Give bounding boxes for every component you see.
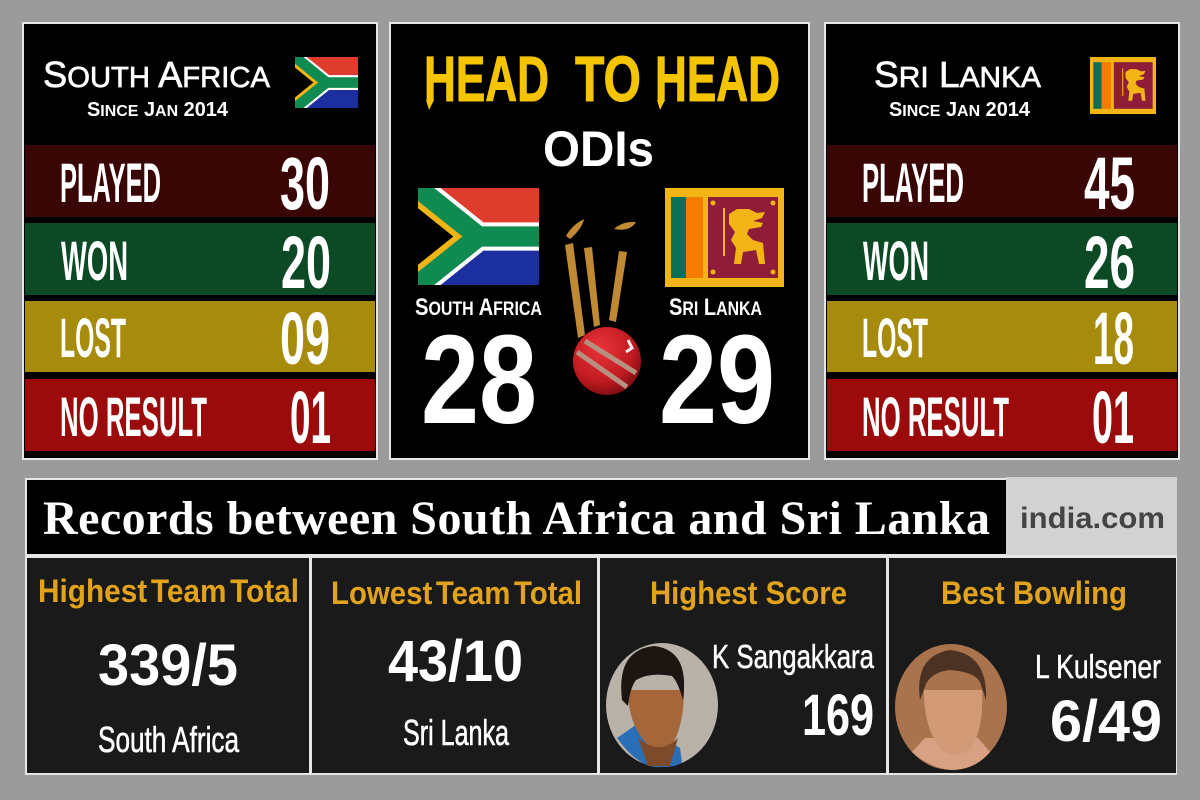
row: played: 45 (1084, 142, 1135, 225)
card: lowest team total: Sri Lanka (403, 712, 510, 753)
row: no result (827, 376, 1177, 459)
row: no result (25, 376, 375, 459)
heading: Sri Lanka: SRI LANKA (874, 54, 1042, 95)
portrait: L Kulsener (895, 644, 1007, 770)
card: lowest team total (312, 558, 597, 773)
title bar: records between teams (27, 480, 1006, 554)
row: played: PLAYED (60, 151, 161, 214)
card: lowest team total: Lowest Team Total (331, 575, 582, 611)
icon: South Africa flag small (295, 57, 358, 108)
card: best bowling: L Kulsener (1035, 648, 1161, 685)
title: head to head (424, 43, 780, 115)
row: no result: NO RESULT (60, 385, 207, 448)
row: lost (827, 297, 1177, 380)
panel: head to head (390, 23, 809, 459)
row: no result: NO RESULT (862, 385, 1009, 448)
subheading: since Jan 2014: SINCE JAN 2014 (87, 99, 229, 121)
score: South Africa 28: 28 (421, 309, 537, 450)
row: played: PLAYED (862, 151, 964, 214)
row: lost: 09 (280, 297, 330, 380)
card: highest score: 169 (802, 683, 874, 748)
panel: Sri Lanka stats (825, 23, 1179, 459)
card: lowest team total: 43/10 (388, 629, 523, 694)
row: played: 30 (280, 142, 330, 225)
panel: South Africa stats (23, 23, 377, 459)
row: lost: 18 (1093, 297, 1134, 380)
card: highest team total: South Africa (98, 719, 240, 760)
title: head to head: TO (575, 43, 641, 115)
icon: Sri Lanka flag small (1090, 57, 1156, 114)
row: won: 26 (1084, 221, 1135, 304)
score: Sri Lanka 29: 29 (659, 309, 775, 450)
card: highest team total (27, 558, 309, 773)
card: highest team total: Highest Team Total (38, 573, 299, 609)
card: highest team total: 339/5 (98, 633, 238, 698)
panel: records (25, 477, 1177, 775)
logo: india.com (1006, 477, 1177, 555)
row: won: 20 (281, 221, 331, 304)
card: highest score: Highest Score (650, 575, 847, 611)
row: won: WON (61, 229, 128, 292)
title bar: records between teams: Records between South Africa and Sri Lanka (43, 492, 990, 545)
title: head to head: HEAD (655, 43, 780, 115)
card: highest score (600, 558, 886, 773)
card: best bowling (889, 558, 1176, 773)
row: no result: 01 (1092, 376, 1134, 459)
row: won (25, 221, 375, 304)
logo: india.com: india.com (1020, 502, 1165, 535)
icon: stumps and bails (565, 219, 636, 338)
heading: South Africa: SOUTH AFRICA (43, 54, 271, 95)
card: highest score: K Sangakkara (712, 638, 874, 675)
icon: cricket ball (573, 327, 641, 395)
row: played (25, 142, 375, 225)
row: lost: LOST (862, 306, 928, 369)
card: best bowling: 6/49 (1050, 689, 1162, 754)
subtitle: ODIs: ODIs (543, 121, 654, 177)
title: head to head: HEAD (424, 43, 549, 115)
row: lost: LOST (60, 306, 126, 369)
row: won (827, 221, 1177, 304)
icon: South Africa flag (418, 188, 539, 285)
label: Sri Lanka: SRI LANKA (669, 294, 762, 321)
label: South Africa: SOUTH AFRICA (415, 294, 542, 321)
subheading: since Jan 2014: SINCE JAN 2014 (889, 99, 1031, 121)
card: best bowling: Best Bowling (941, 575, 1127, 611)
row: lost (25, 297, 375, 380)
portrait: K Sangakkara (606, 643, 718, 767)
row: played (827, 142, 1177, 225)
icon: Sri Lanka flag (665, 188, 784, 287)
row: no result: 01 (290, 376, 331, 459)
row: won: WON (863, 229, 929, 292)
